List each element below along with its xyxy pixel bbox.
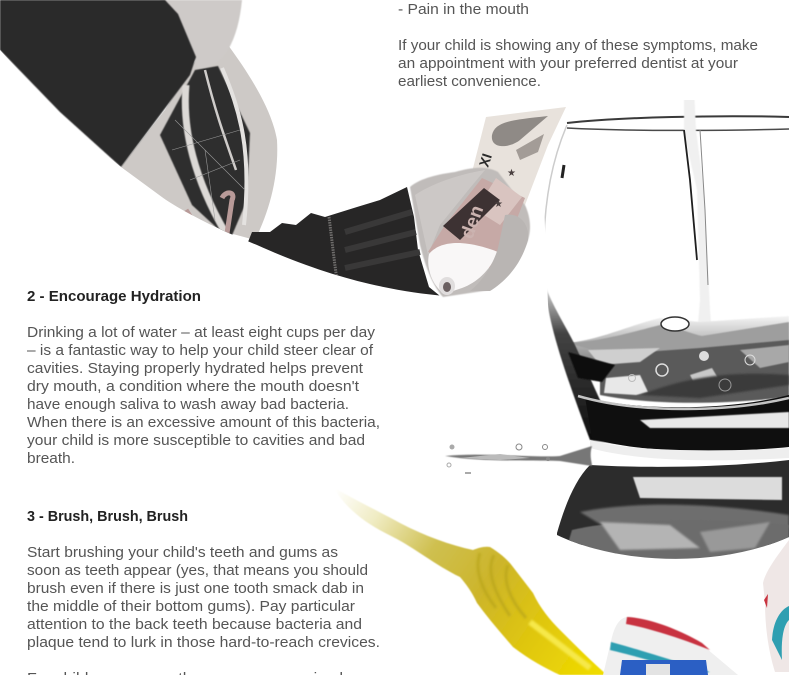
text block: pain symptom and dentist advice: If your child is showing any of these symptoms, make — [398, 38, 758, 54]
text block: brushing: the middle of their bottom gums). Pay particular — [27, 599, 355, 615]
text block: pain symptom and dentist advice — [398, 2, 758, 90]
water stream — [683, 100, 710, 322]
tube artwork — [476, 116, 548, 169]
text block: brushing: attention to the back teeth because bacteria and — [27, 617, 362, 633]
glass rim — [567, 116, 789, 123]
blonde hair — [121, 45, 277, 240]
water splash on table — [445, 444, 592, 474]
tube artwork: XI — [476, 151, 495, 169]
photo: child with blonde hair and dark sleeve — [0, 0, 445, 300]
text block: hydration — [27, 325, 380, 467]
text block: pain symptom and dentist advice: - Pain in the mouth — [398, 2, 529, 18]
text block: hydration: Drinking a lot of water – at least eight cups per day — [27, 325, 376, 341]
text block: brushing: brush even if there is just one tooth smack dab in — [27, 581, 364, 597]
reflection on table — [557, 460, 789, 545]
text block: hydration: – is a fantastic way to help your child steer clear of — [27, 343, 374, 359]
text block: hydration: your child is more susceptible to cavities and bad — [27, 433, 365, 449]
heading: brush: 3 - Brush, Brush, Brush — [27, 509, 188, 525]
text block: brushing: plaque tend to lurk in those hard-to-reach crevices. — [27, 635, 380, 651]
text block: hydration: breath. — [27, 451, 75, 467]
text block: brushing — [27, 545, 380, 675]
water surface — [567, 316, 789, 360]
heading: encourage hydration: 2 - Encourage Hydration — [27, 289, 201, 305]
text block: pain symptom and dentist advice: an appointment with your preferred dentist at your — [398, 56, 738, 72]
stars: ★ — [507, 168, 516, 179]
nozzle — [439, 277, 455, 295]
tube brand label — [443, 188, 500, 242]
tube body — [428, 178, 525, 268]
text block: hydration: When there is an excessive amount of this bacteria, — [27, 415, 380, 431]
photo: child's hand squeezing toothpaste tube: ★ — [494, 199, 503, 210]
photo: toothpaste stripe and brush head — [603, 617, 738, 675]
tube shoulder — [428, 243, 498, 294]
bubbles and turbulence — [588, 340, 789, 403]
fingers and palm — [410, 168, 530, 297]
text block: brushing: Start brushing your child's teeth and gums as — [27, 545, 338, 561]
tube crimp end — [470, 107, 566, 205]
finger over tube — [470, 215, 528, 291]
photo: second toothpaste swirl at right edge — [763, 540, 789, 672]
hand at top of image — [161, 0, 242, 61]
text block: hydration: dry mouth, a condition where the mouth doesn't — [27, 379, 359, 395]
tube brand label: den — [457, 203, 488, 242]
text block: hydration: have enough saliva to wash away bad bacteria. — [27, 397, 349, 413]
glass thick base — [585, 395, 789, 451]
text block: pain symptom and dentist advice: earliest convenience. — [398, 74, 541, 90]
text block: brushing: soon as teeth appear (yes, that means you should — [27, 563, 368, 579]
photo: water pouring into a glass — [537, 88, 789, 570]
glass foot highlight — [590, 440, 789, 460]
forearm sleeve — [248, 187, 440, 296]
photo: yellow toothbrush handle — [333, 487, 607, 675]
text block: hydration: cavities. Staying properly hydrated helps prevent — [27, 361, 363, 377]
glass left dark edge — [545, 285, 625, 445]
shirt print — [186, 193, 233, 240]
dark sleeve — [0, 0, 196, 167]
glass left wall — [544, 124, 568, 232]
photo: child's hand squeezing toothpaste tube — [410, 107, 566, 297]
